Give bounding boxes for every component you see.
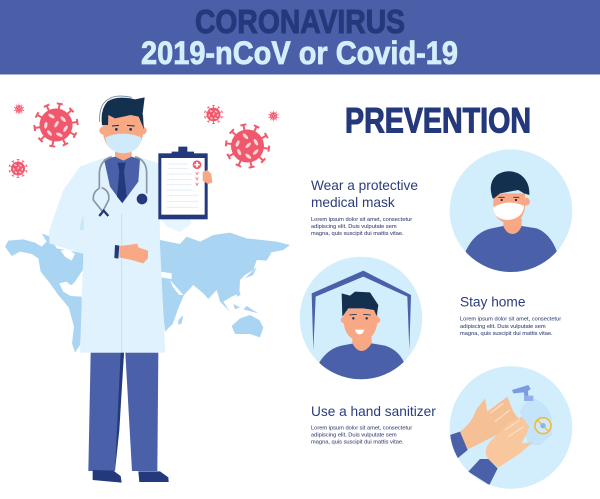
- lorem ipsum paragraph: Lorem ipsum dolor sit amet, consectetur: [460, 316, 561, 322]
- virus small center: [205, 105, 222, 124]
- trousers: [88, 353, 169, 483]
- virus particles: [9, 100, 278, 178]
- virus large left: [31, 100, 81, 150]
- shirt and tie: [104, 157, 140, 203]
- sanitizer bottle: [512, 385, 552, 445]
- virus small left: [9, 159, 27, 178]
- clipboard: [158, 147, 212, 219]
- lorem ipsum paragraph: magna, quis suscipit dui mattis vitae.: [311, 231, 404, 237]
- step 2 circle: person at home: [300, 257, 422, 388]
- doctor: [49, 96, 212, 483]
- lab coat: [49, 157, 165, 353]
- shoes: [93, 470, 122, 483]
- heading: prevention: PREVENTION: [345, 102, 531, 140]
- lorem ipsum paragraph: Lorem ipsum dolor sit amet, consectetur: [311, 217, 412, 223]
- neck: [115, 147, 132, 161]
- shirt: [466, 226, 557, 277]
- step 2 text: stay home: [460, 294, 561, 337]
- step 1 text: wear a mask: [311, 178, 418, 237]
- step 3 text: hand sanitizer: [311, 404, 436, 446]
- world map: [5, 233, 290, 353]
- head: [99, 96, 147, 153]
- house outline: [312, 271, 411, 350]
- hand holding clipboard: [203, 170, 212, 184]
- title: coronavirus: CORONAVIRUS: [195, 3, 405, 40]
- hair: [102, 97, 145, 129]
- step 1 circle: person wearing mask: [450, 149, 572, 277]
- left hand: [460, 397, 518, 450]
- subtitle: virus names: 2019-nCoV or Covid-19: [141, 35, 458, 71]
- step 3 text: hand sanitizer: Use a hand sanitizer: [311, 404, 436, 419]
- lorem ipsum paragraph: magna, quis suscipit dui mattis vitae.: [311, 440, 404, 446]
- eyes: [115, 128, 118, 131]
- virus small top-left: [14, 104, 24, 114]
- virus large right: [219, 117, 276, 175]
- lorem ipsum paragraph: [460, 316, 561, 337]
- header banner: [0, 0, 600, 74]
- lorem ipsum paragraph: magna, quis suscipit dui mattis vitae.: [460, 331, 553, 337]
- lorem ipsum paragraph: adipiscing elit. Duis vulputate sem: [311, 224, 397, 230]
- lorem ipsum paragraph: [311, 426, 412, 446]
- stethoscope: [93, 157, 147, 216]
- step 1 text: wear a mask: Wear a protective: [311, 178, 418, 193]
- lorem ipsum paragraph: [311, 217, 412, 237]
- step 3 circle: hands and sanitizer: [447, 366, 572, 489]
- right hand: [486, 417, 533, 468]
- lorem ipsum paragraph: Lorem ipsum dolor sit amet, consectetur: [311, 426, 412, 432]
- virus small right: [269, 111, 278, 121]
- lorem ipsum paragraph: adipiscing elit. Duis vulputate sem: [460, 324, 546, 330]
- hand on chest: [114, 244, 148, 263]
- face mask: [105, 134, 141, 153]
- clipboard sleeve: [157, 163, 192, 232]
- step 2 text: stay home: Stay home: [460, 294, 525, 310]
- lorem ipsum paragraph: adipiscing elit. Duis vulputate sem: [311, 432, 397, 438]
- step 1 text: wear a mask: medical mask: [311, 195, 395, 210]
